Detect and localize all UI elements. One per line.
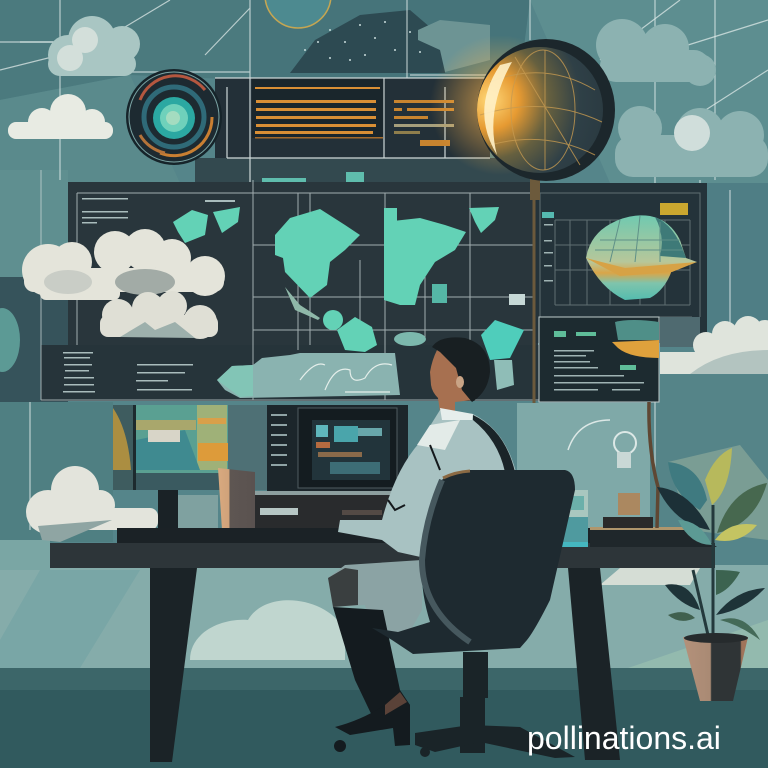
cloud: grey-green upper [418,20,490,72]
floor [0,668,768,768]
head [430,337,490,412]
wall icons [568,420,636,468]
books and items on desk [560,490,653,547]
cloud: top left [48,16,140,76]
starry dark region [290,10,445,73]
cloud: bright puff [674,115,710,151]
coffee cup [218,468,255,530]
screen grid [41,170,540,400]
map white marker [509,294,525,305]
cloud: top right [596,19,716,86]
small dome [612,320,659,358]
clouds upper left [8,16,140,139]
clouds upper right [596,19,768,177]
map teal fragments above screen [262,172,364,188]
teal bars [554,331,636,370]
potted plant [657,448,767,701]
cloud: behind desk [26,466,158,542]
shoe [334,692,410,752]
map continents [173,207,524,390]
desk [50,527,717,762]
radar dial [127,70,221,164]
background lines [0,0,768,530]
right monitor [267,405,408,492]
screen clouds [22,229,225,339]
side data lines [542,212,644,390]
cloud: right [615,106,768,177]
side screen badge [660,203,688,215]
top gauge circle [265,0,331,28]
shirt [338,408,516,558]
lower cloud on screen [217,353,400,398]
large orange globe [430,35,615,200]
stem [693,505,713,635]
legs [328,560,422,722]
watermark: pollinations.ai [527,720,721,756]
office chair [372,470,575,758]
left monitor [113,405,268,528]
cloud: lower wall [190,600,345,660]
right data bars [394,100,454,146]
lamp stem [649,402,658,528]
main world map screen [41,170,540,401]
pot [683,637,748,701]
upper dashboard panel [195,78,540,188]
orange data bars [255,87,383,138]
person [328,337,516,752]
cloud: right edge [660,316,768,374]
desk equipment [255,491,395,528]
cloud: left [8,94,113,139]
cloud: small [100,291,218,339]
right side screen [534,183,707,403]
upper leaves [668,462,707,510]
small globe [586,215,697,300]
lower leaves [665,584,700,610]
legend lines [63,198,235,392]
cloud: large [22,229,225,300]
